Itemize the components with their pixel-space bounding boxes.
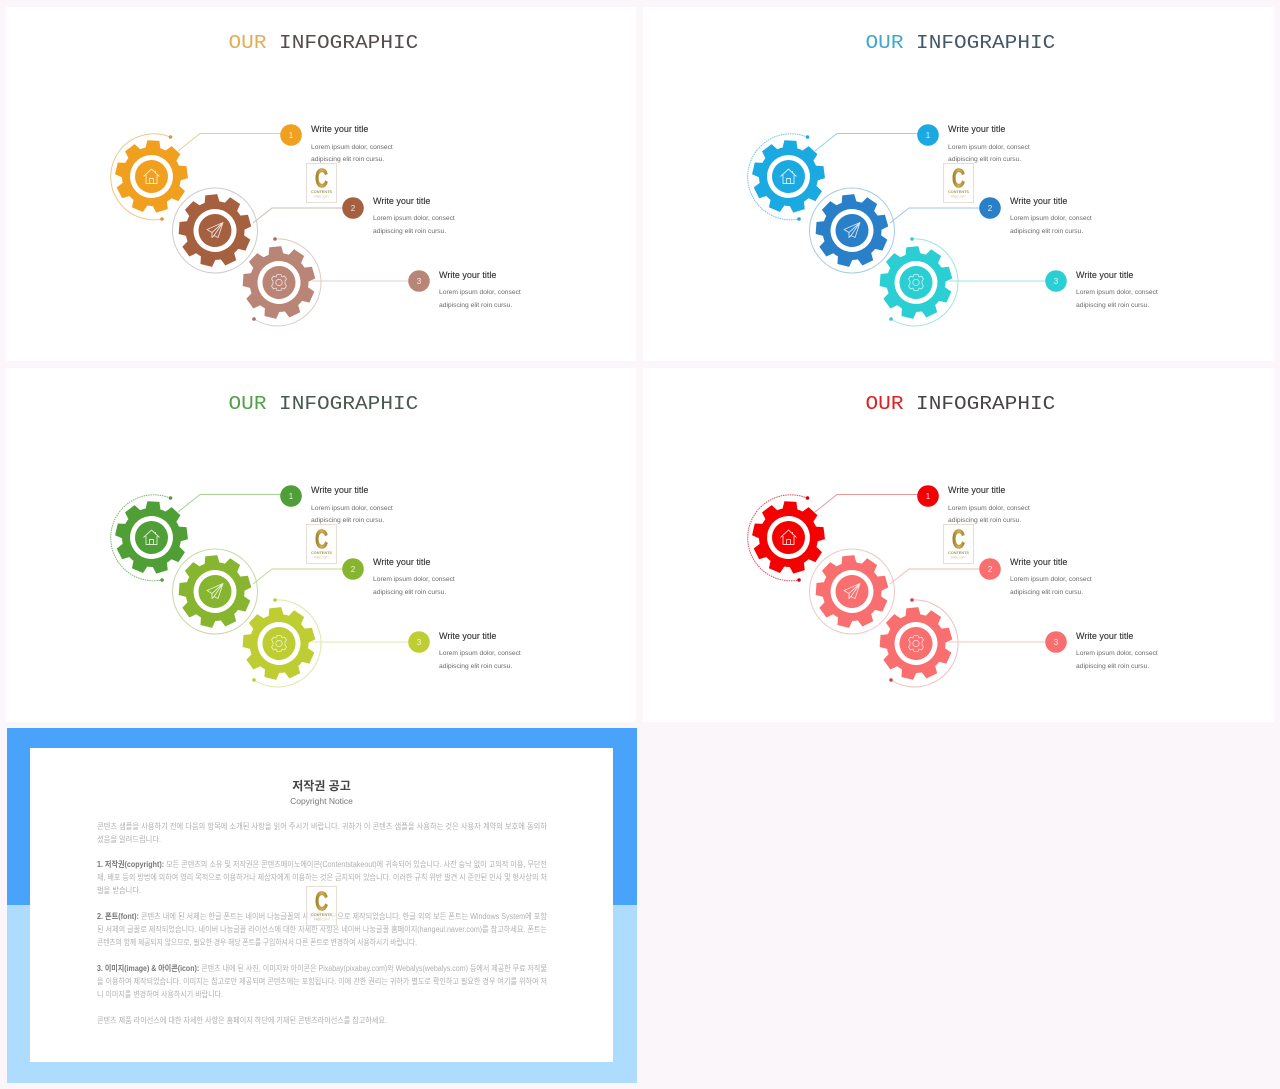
item 1: red: Lorem ipsum dolor, consect	[948, 505, 1030, 512]
item 1: red	[917, 485, 1030, 524]
logo badge: blue: FREE COPY	[951, 194, 966, 198]
item 3: orange	[408, 270, 521, 309]
item 3: blue: Lorem ipsum dolor, consect	[1076, 289, 1158, 296]
copyright intro text: 콘텐츠 샘플을 사용하기 전에 다음의 항목에 소개된 사항을 읽어 주시기 바랍니다. 귀하가 이 콘텐츠 샘플을 사용하는 것은 사용자 계약의 보호에 동의하	[97, 821, 548, 831]
section 2 text: 콘텐츠의 함께 제공되지 않으므로, 필요한 경우 해당 폰트를 구입하셔서 다른 폰트로 변경하여 사용하시기 바랍니다.	[97, 937, 417, 947]
item 1: blue: Lorem ipsum dolor, consect	[948, 144, 1030, 151]
copyright intro text: 셨음을 알려드립니다.	[97, 834, 161, 844]
copyright subtitle: Copyright Notice	[290, 796, 353, 806]
item 2: blue	[979, 196, 1092, 235]
copyright intro text	[97, 821, 548, 844]
item 1: orange: adipiscing elit roin cursu.	[311, 156, 384, 163]
item 3: blue: 3	[1054, 277, 1059, 286]
item 1: orange: 1	[289, 131, 294, 140]
section 3 text: 3. 이미지(image) & 아이콘(icon): 콘텐츠 내에 된 사진, 이미지와 아이콘은 Pixabay(pixabay.com)와 Webalys(webalys.com) 등에서 제공한 무료 저작물	[97, 963, 547, 973]
logo badge: green: CONTENTS	[311, 551, 332, 555]
item 2: orange: Lorem ipsum dolor, consect	[373, 215, 455, 222]
logo badge: orange: C	[315, 163, 328, 193]
gear diagram: red	[748, 494, 1045, 688]
item 2: green: adipiscing elit roin cursu.	[373, 589, 446, 596]
section 1 text: 1. 저작권(copyright): 모든 콘텐츠의 소유 및 저작권은 콘텐츠메이노에이븐(Contentstakeout)에 귀속되어 있습니다. 사전 승낙 없이 고의적 이용, 무단전	[97, 859, 547, 869]
logo badge: blue	[944, 163, 974, 202]
item 1: green: adipiscing elit roin cursu.	[311, 517, 384, 524]
logo badge: green: FREE COPY	[314, 556, 329, 560]
logo badge: orange: FREE COPY	[314, 194, 329, 198]
item 3: green: 3	[417, 638, 422, 647]
item 1: green: 1	[289, 492, 294, 501]
item 2: orange: 2	[351, 204, 356, 213]
item 3: orange: Lorem ipsum dolor, consect	[439, 289, 521, 296]
item 3: orange: 3	[417, 277, 422, 286]
panel: blue infographic	[643, 7, 1274, 361]
item 3: red: Write your title	[1076, 631, 1133, 641]
section 1 text: 재, 배포 등의 방법에 의하여 영리 목적으로 이용하거나 제삼자에게 이용하는 것은 금지되어 있습니다. 이러한 규칙 위반 발견 시 준인된 민사 및 형사상의 처	[97, 872, 547, 882]
item 2: red	[979, 557, 1092, 596]
item 2: blue: Write your title	[1010, 196, 1067, 206]
item 3: orange: adipiscing elit roin cursu.	[439, 302, 512, 309]
gear diagram: green	[111, 494, 408, 688]
item 3: blue: adipiscing elit roin cursu.	[1076, 302, 1149, 309]
item 1: blue	[917, 124, 1030, 163]
heading: blue: OUR INFOGRAPHIC	[866, 33, 1055, 55]
panel: orange infographic	[6, 7, 636, 361]
item 1: orange	[280, 124, 393, 163]
logo badge: copyright: FREE COPY	[314, 918, 329, 922]
logo badge: copyright: CONTENTS	[311, 913, 332, 917]
item 2: red: adipiscing elit roin cursu.	[1010, 589, 1083, 596]
item 2: blue: 2	[988, 204, 993, 213]
item 1: red: 1	[926, 492, 931, 501]
item 2: green: Lorem ipsum dolor, consect	[373, 576, 455, 583]
section 1 text	[97, 859, 547, 895]
heading: green: OUR INFOGRAPHIC	[228, 394, 418, 416]
section 2 text: 2. 폰트(font): 콘텐츠 내에 된 서체는 한글 폰트는 네이버 나눔글꼴의 서체를 기본으로 제작되었습니다. 한글 외의 보든 폰트는 Windows System에 포함	[97, 911, 548, 921]
item 2: orange: Write your title	[373, 196, 430, 206]
item 1: green	[280, 485, 393, 524]
item 3: orange: Write your title	[439, 270, 496, 280]
panel: red infographic	[643, 368, 1274, 722]
item 3: blue: Write your title	[1076, 270, 1133, 280]
section 3 text: 을 이용하여 제작되었습니다. 이미지는 참고로만 제공되며 콘텐츠에는 포함됩니다. 이에 관한 권리는 귀하가 별도로 확인하고 필요한 경우 여기를 위하여 저	[97, 976, 547, 986]
closing text: 콘텐츠 제품 라이선스에 대한 자세한 사항은 홈페이지 하단에 기재된 콘텐츠라이선스를 참고하세요.	[97, 1015, 387, 1025]
logo badge: copyright	[306, 886, 336, 926]
heading: orange: OUR INFOGRAPHIC	[228, 33, 418, 55]
item 2: green	[342, 557, 455, 596]
panel: copyright notice	[7, 728, 637, 1083]
item 2: blue: adipiscing elit roin cursu.	[1010, 228, 1083, 235]
logo badge: orange	[306, 163, 336, 202]
heading: red: OUR INFOGRAPHIC	[866, 394, 1055, 416]
item 1: blue: 1	[926, 131, 931, 140]
item 1: orange: Lorem ipsum dolor, consect	[311, 144, 393, 151]
item 2: red: Lorem ipsum dolor, consect	[1010, 576, 1092, 583]
logo badge: orange: CONTENTS	[311, 190, 332, 194]
item 2: blue: Lorem ipsum dolor, consect	[1010, 215, 1092, 222]
section 2 text	[97, 911, 548, 947]
item 2: red: Write your title	[1010, 557, 1067, 567]
logo badge: red: FREE COPY	[951, 556, 966, 560]
item 1: green: Lorem ipsum dolor, consect	[311, 505, 393, 512]
logo badge: blue: CONTENTS	[948, 190, 969, 194]
section 3 text	[97, 963, 547, 999]
item 3: red: adipiscing elit roin cursu.	[1076, 663, 1149, 670]
item 3: red: 3	[1054, 638, 1059, 647]
gear diagram: blue	[748, 134, 1045, 327]
logo badge: green: C	[315, 524, 328, 554]
item 2: green: Write your title	[373, 557, 430, 567]
logo badge: red	[944, 524, 974, 564]
logo badge: copyright: C	[315, 886, 328, 916]
item 1: blue: adipiscing elit roin cursu.	[948, 156, 1021, 163]
item 3: green: Lorem ipsum dolor, consect	[439, 650, 521, 657]
panel: green infographic	[6, 368, 636, 722]
section 2 text: 된 서체의 글꼴로 제작되었습니다. 네이버 나눔글꼴 라이선스에 대한 자세한 사항은 네이버 나눔글꼴 홈페이지(hangeul.naver.com)를 참고하세요. 폰트는	[97, 924, 547, 934]
item 1: blue: Write your title	[948, 124, 1005, 134]
item 3: red	[1045, 631, 1158, 670]
item 3: green: Write your title	[439, 631, 496, 641]
item 1: green: Write your title	[311, 485, 368, 495]
logo badge: green	[306, 524, 336, 564]
logo badge: red: C	[952, 524, 965, 554]
section 3 text: 니 이미지를 변경하여 사용하시기 바랍니다.	[97, 989, 223, 999]
item 3: green: adipiscing elit roin cursu.	[439, 663, 512, 670]
item 3: red: Lorem ipsum dolor, consect	[1076, 650, 1158, 657]
section 1 text: 벌을 받습니다.	[97, 885, 141, 895]
logo badge: red: CONTENTS	[948, 551, 969, 555]
gear diagram: orange	[111, 134, 408, 327]
item 3: green	[408, 631, 521, 670]
item 1: orange: Write your title	[311, 124, 368, 134]
logo badge: blue: C	[952, 163, 965, 193]
item 2: orange: adipiscing elit roin cursu.	[373, 228, 446, 235]
item 2: orange	[342, 196, 455, 235]
item 2: green: 2	[351, 565, 356, 574]
item 1: red: Write your title	[948, 485, 1005, 495]
copyright heading: 저작권 공고	[292, 778, 351, 793]
item 1: red: adipiscing elit roin cursu.	[948, 517, 1021, 524]
item 3: blue	[1045, 270, 1158, 309]
item 2: red: 2	[988, 565, 993, 574]
